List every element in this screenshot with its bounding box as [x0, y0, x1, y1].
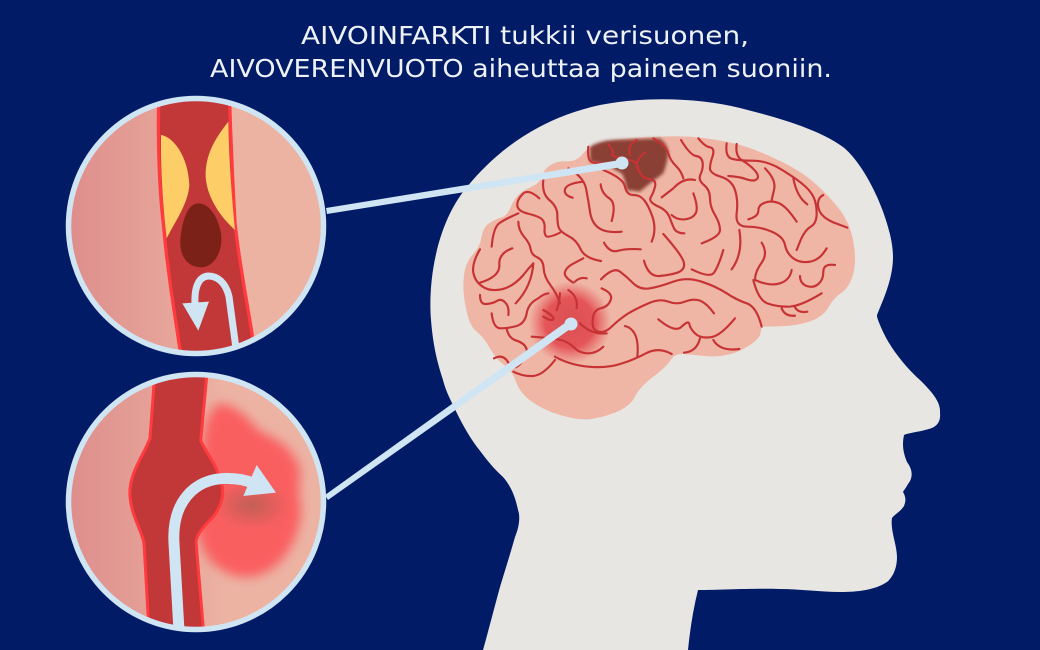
vessel	[130, 370, 223, 637]
flow arrow	[195, 276, 237, 353]
infarct area	[590, 138, 668, 192]
sulci	[473, 138, 847, 376]
blood clot	[180, 203, 221, 267]
title: AIVOVERENVUOTO aiheuttaa paineen suoniin.	[210, 54, 832, 83]
circle: blocked vessel	[68, 90, 324, 367]
plaque right	[206, 122, 235, 230]
title	[210, 21, 832, 83]
brain shape	[463, 136, 855, 419]
connector line: hemorrhage	[325, 318, 578, 500]
title: AIVOINFARKTI tukkii verisuonen,	[301, 21, 749, 50]
plaque left	[161, 135, 189, 238]
brain	[463, 136, 855, 419]
head silhouette	[430, 99, 940, 650]
connector line: infarction	[326, 156, 628, 214]
hemorrhage glow	[529, 281, 611, 364]
bleeding area	[197, 403, 301, 577]
vessel	[158, 90, 255, 367]
flow arrow	[174, 478, 255, 637]
circle: ruptured vessel	[68, 370, 324, 637]
